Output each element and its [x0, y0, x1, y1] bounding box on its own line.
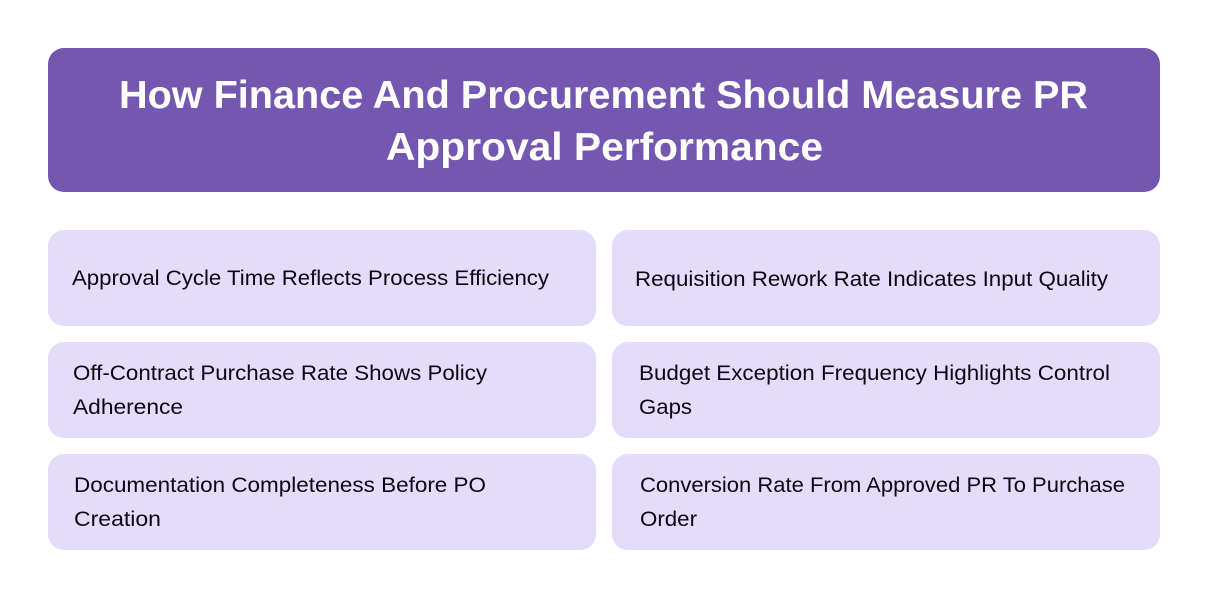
card: requisition rework rate [612, 230, 1160, 326]
title text [119, 74, 1088, 169]
card: approval cycle time [48, 230, 596, 326]
card: approval cycle time: Approval Cycle Time Reflects Process Efficiency [72, 267, 550, 290]
card: budget exception frequency [612, 342, 1160, 438]
card: off-contract purchase rate: Adherence [73, 396, 183, 419]
card: documentation completeness [48, 454, 596, 550]
title banner [48, 48, 1160, 192]
card: off-contract purchase rate [48, 342, 596, 438]
card: requisition rework rate: Requisition Rework Rate Indicates Input Quality [635, 268, 1109, 291]
card: conversion rate: Order [640, 508, 697, 531]
card: budget exception frequency: Budget Exception Frequency Highlights Control [639, 362, 1110, 385]
card: budget exception frequency: Gaps [639, 396, 692, 419]
card: documentation completeness: Documentation Completeness Before PO [74, 474, 486, 497]
title text: How Finance And Procurement Should Measure PR [119, 74, 1088, 117]
card: documentation completeness: Creation [74, 508, 161, 531]
card: off-contract purchase rate: Off-Contract Purchase Rate Shows Policy [73, 362, 488, 385]
title text: Approval Performance [386, 126, 823, 169]
card: conversion rate: Conversion Rate From Approved PR To Purchase [640, 474, 1125, 497]
card: conversion rate [612, 454, 1160, 550]
